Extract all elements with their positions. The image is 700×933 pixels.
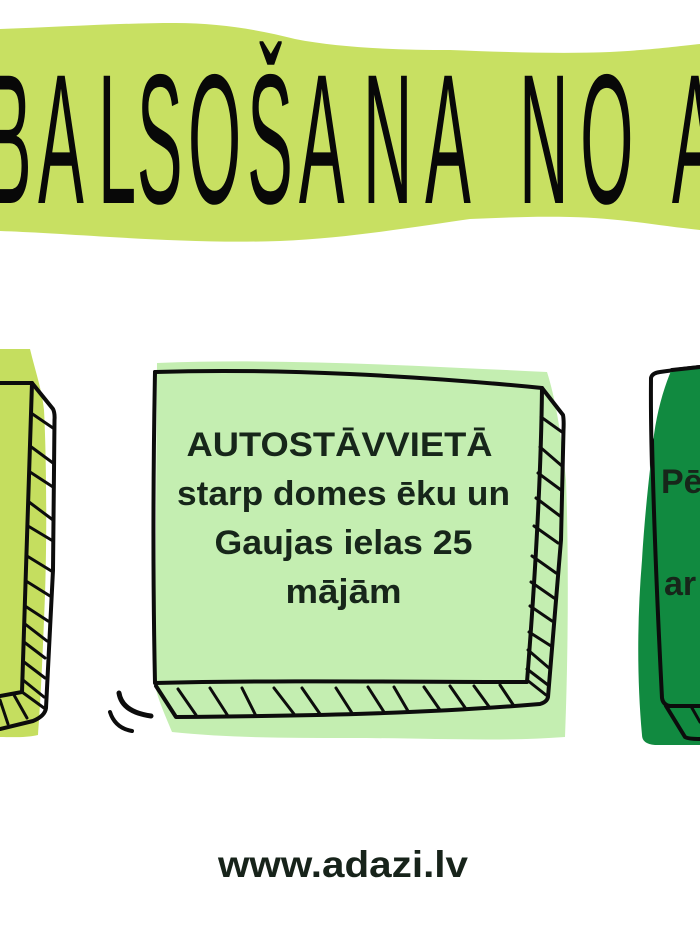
card outline bbox=[155, 371, 564, 717]
card text: Gaujas ielas 25 bbox=[214, 524, 472, 562]
card text bbox=[177, 426, 510, 611]
side hatching bbox=[178, 417, 562, 716]
panel: left card bbox=[0, 349, 55, 737]
right card text bbox=[661, 463, 700, 603]
card text: starp domes ēku un bbox=[177, 475, 510, 513]
website address: www.adazi.lv bbox=[217, 844, 468, 885]
icon: motion marks bbox=[110, 693, 151, 731]
card background bbox=[155, 361, 568, 740]
panel: centre card bbox=[154, 361, 568, 740]
card text: AUTOSTĀVVIETĀ bbox=[186, 426, 492, 464]
title banner bbox=[0, 23, 700, 243]
card text: mājām bbox=[286, 573, 402, 611]
panel: right card bbox=[638, 367, 700, 745]
right card text: ar bbox=[664, 565, 696, 603]
